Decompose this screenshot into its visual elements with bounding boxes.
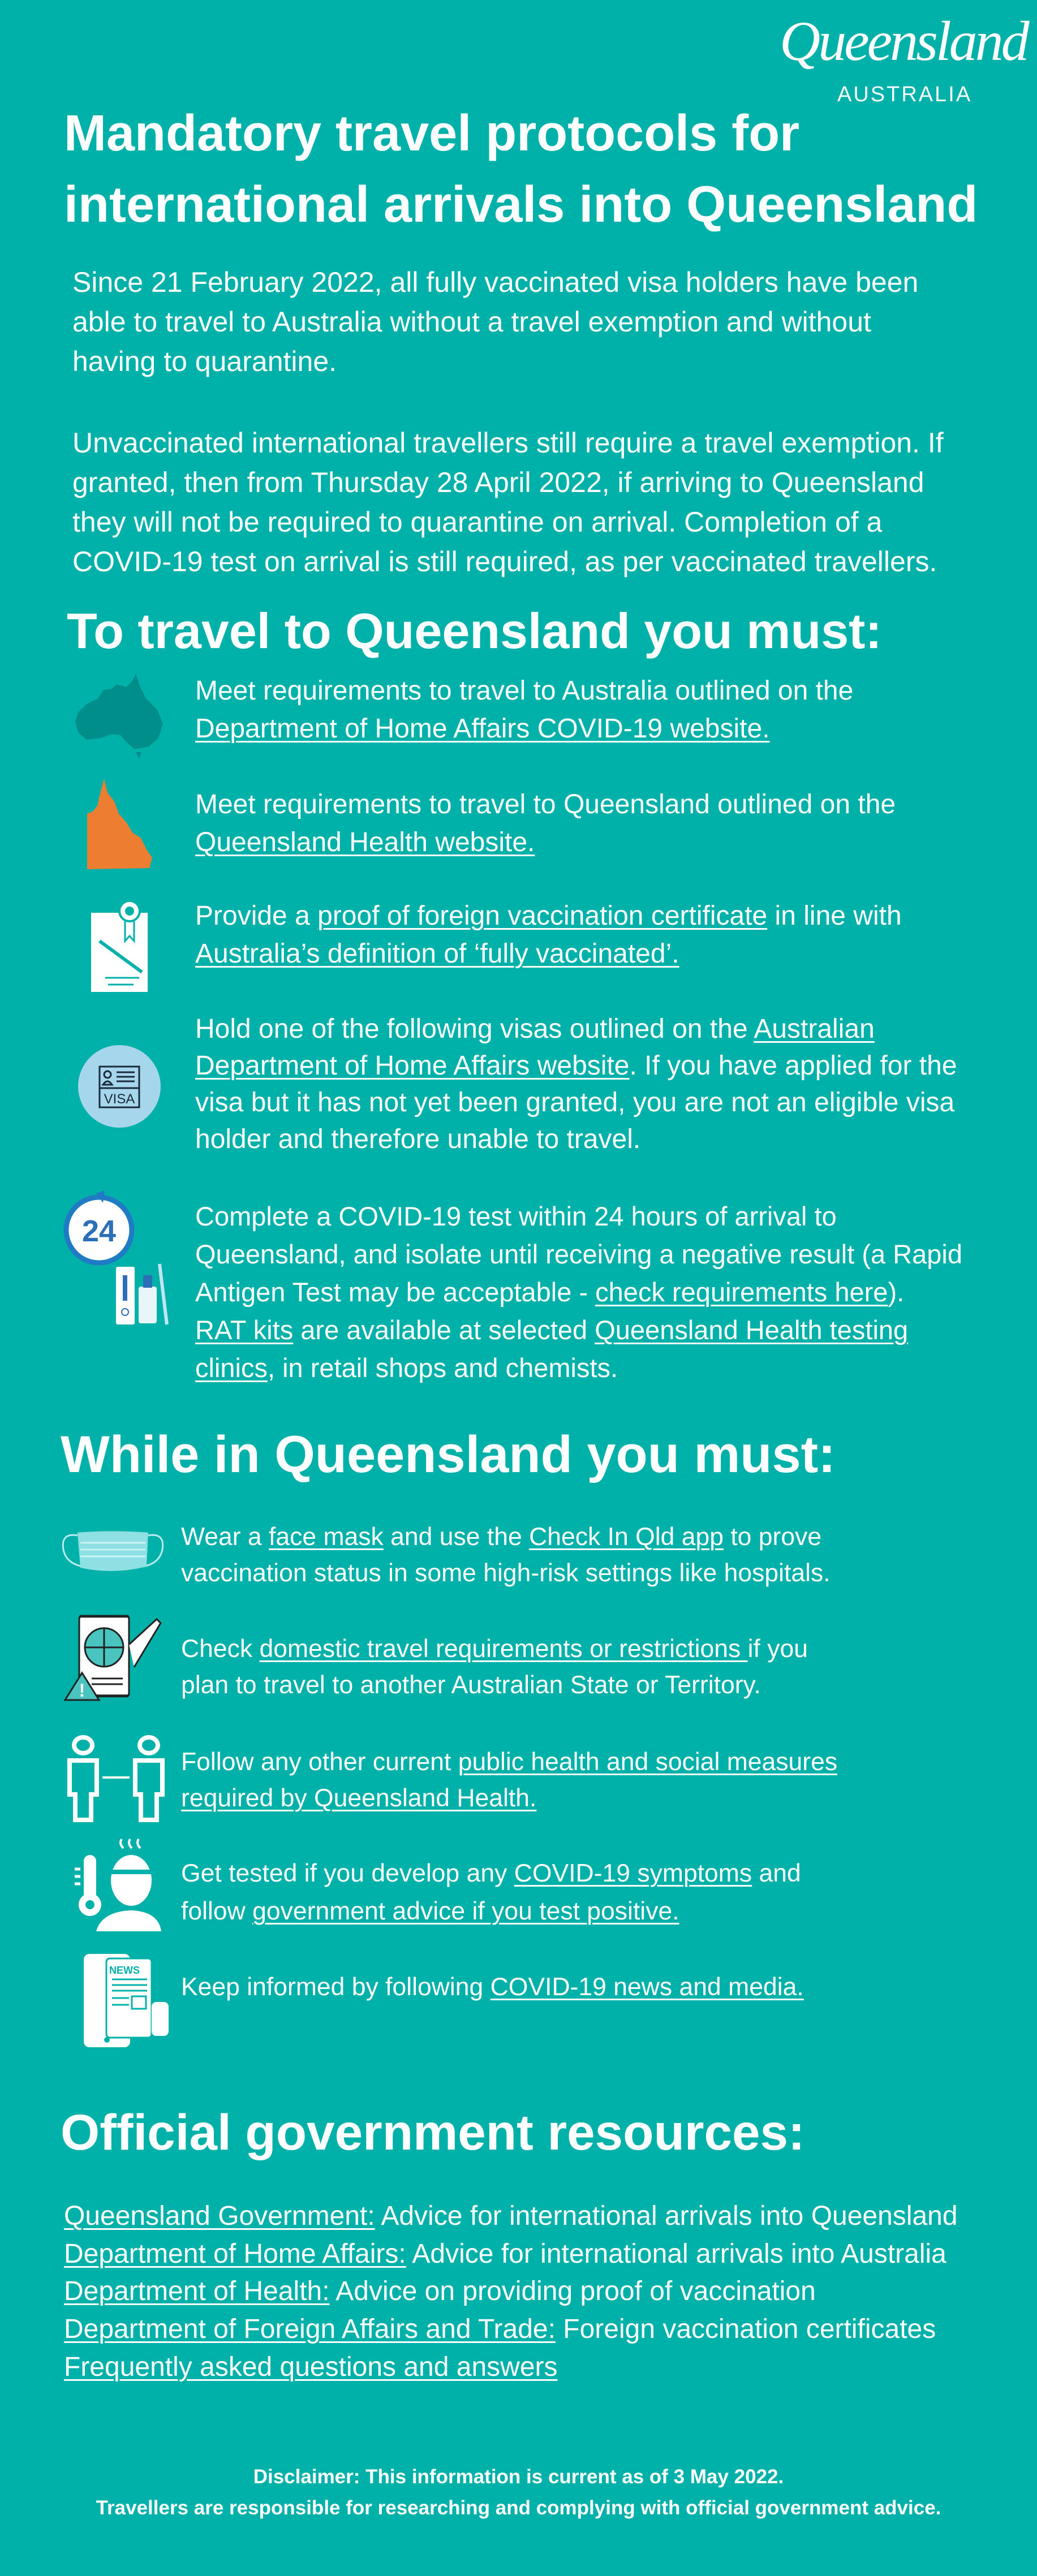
title: international arrivals into Queensland [64, 176, 978, 233]
intro paragraph 2: they will not be required to quarantine on arrival. Completion of a [72, 506, 882, 538]
text: requirement 4: holder and therefore unable to travel. [195, 1124, 640, 1154]
text: requirement 2: Meet requirements to travel to Queensland outlined on the [195, 789, 896, 819]
title: Mandatory travel protocols for [64, 105, 799, 162]
disclaimer: Travellers are responsible for researching and complying with official government advice. [96, 2497, 941, 2519]
icon: vaccination certificate [91, 902, 148, 992]
text: requirement 3: Australia’s definition of ‘fully vaccinated’. [195, 939, 679, 969]
icon: visa: VISA [104, 1091, 135, 1107]
intro paragraph 1: Since 21 February 2022, all fully vaccinated visa holders have been [72, 266, 918, 298]
icon: face mask [62, 1531, 164, 1571]
intro paragraph 2: Unvaccinated international travellers still require a travel exemption. If [72, 427, 944, 459]
logo: AUSTRALIA [837, 83, 972, 106]
resource links list: Department of Home Affairs: Advice for international arrivals into Australia [64, 2239, 946, 2269]
icon: 24 hour test [63, 1190, 169, 1324]
intro paragraph 2: COVID-19 test on arrival is still required, as per vaccinated travellers. [72, 546, 937, 577]
resource links list: Queensland Government: Advice for international arrivals into Queensland [64, 2201, 958, 2231]
text: domestic travel [181, 1635, 808, 1699]
text: health measures: required by Queensland Health. [181, 1784, 536, 1812]
resource links list: Department of Health: Advice on providing proof of vaccination [64, 2276, 816, 2306]
logo: Queensland [780, 10, 1027, 72]
disclaimer: Disclaimer: This information is current as of 3 May 2022. [253, 2466, 784, 2488]
icon: passport and plane [63, 1615, 162, 1701]
text: requirement 2 [195, 789, 896, 857]
heading: official resources: Official government resources: [61, 2104, 805, 2160]
logo [780, 10, 1030, 106]
resource links list [64, 2201, 958, 2382]
text: health measures [181, 1748, 837, 1812]
icon: fever person [75, 1839, 161, 1931]
text: domestic travel: Check domestic travel requirements or restrictions if you [181, 1635, 808, 1663]
text: requirement 1 [195, 676, 853, 744]
text: requirement 5: Queensland, and isolate until receiving a negative result (a Rapid [195, 1239, 962, 1269]
text: requirement 2: Queensland Health website. [195, 827, 535, 857]
text: requirement 5: Antigen Test may be acceptable - check requirements here). [195, 1277, 904, 1307]
icon: passport and plane: ! [79, 1680, 85, 1701]
text: requirement 1: Meet requirements to travel to Australia outlined on the [195, 676, 853, 706]
intro paragraph 1 [72, 266, 918, 377]
icon: social distancing [67, 1735, 165, 1822]
icon: visa [78, 1045, 161, 1128]
text: requirement 3 [195, 901, 902, 969]
text: news: Keep informed by following COVID-19 news and media. [181, 1973, 804, 2001]
resource links list: Department of Foreign Affairs and Trade: Foreign vaccination certificates [64, 2314, 936, 2344]
intro paragraph 2 [72, 427, 944, 577]
text: requirement 4: Hold one of the following visas outlined on the Australian [195, 1014, 875, 1044]
text: wear mask [181, 1523, 831, 1587]
resource links list: Frequently asked questions and answers [64, 2352, 558, 2382]
text: symptoms [181, 1859, 801, 1925]
text: wear mask: Wear a face mask and use the Check In Qld app to prove [181, 1523, 821, 1551]
text: wear mask: vaccination status in some high-risk settings like hospitals. [181, 1559, 831, 1587]
text: requirement 4: Department of Home Affairs website. If you have applied for the [195, 1051, 957, 1081]
text: requirement 1: Department of Home Affairs COVID-19 website. [195, 714, 770, 744]
icon: news phone: NEWS [109, 1965, 140, 1976]
text: requirement 5: clinics, in retail shops and chemists. [195, 1353, 618, 1383]
text: requirement 5: RAT kits are available at selected Queensland Health testing [195, 1315, 908, 1345]
heading: while in queensland: While in Queensland you must: [61, 1426, 836, 1483]
text: requirement 3: Provide a proof of foreign vaccination certificate in line with [195, 901, 902, 931]
icon: queensland map [87, 779, 152, 869]
text: symptoms: Get tested if you develop any COVID-19 symptoms and [181, 1859, 801, 1887]
text: symptoms: follow government advice if you test positive. [181, 1897, 679, 1925]
disclaimer [96, 2466, 941, 2519]
icon: 24 hour test: 24 [82, 1214, 116, 1248]
text: requirement 4: visa but it has not yet been granted, you are not an eligible visa [195, 1088, 954, 1117]
icon: australia map [75, 674, 163, 759]
icon: news phone [84, 1954, 169, 2047]
text: domestic travel: plan to travel to another Australian State or Territory. [181, 1671, 761, 1699]
text: health measures: Follow any other current public health and social measures [181, 1748, 837, 1776]
heading: to travel: To travel to Queensland you must: [67, 603, 882, 659]
intro paragraph 2: granted, then from Thursday 28 April 2022, if arriving to Queensland [72, 467, 924, 498]
intro paragraph 1: having to quarantine. [72, 346, 337, 377]
intro paragraph 1: able to travel to Australia without a travel exemption and without [72, 306, 871, 338]
text: requirement 5: Complete a COVID-19 test within 24 hours of arrival to [195, 1201, 837, 1231]
title [64, 105, 978, 233]
text: requirement 4 [195, 1014, 957, 1154]
text: requirement 5 [195, 1201, 962, 1383]
